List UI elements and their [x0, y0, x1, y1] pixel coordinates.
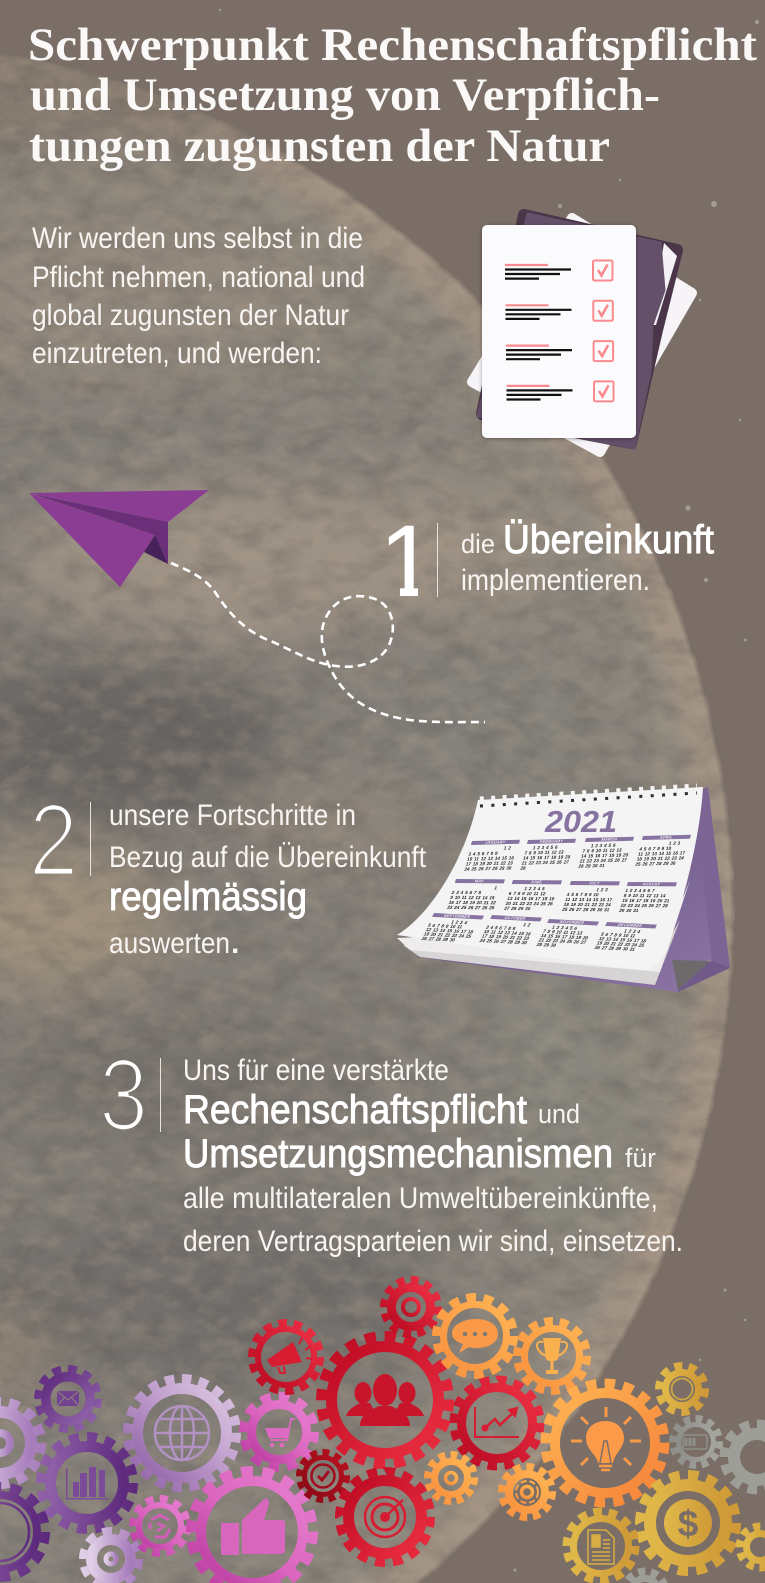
- month: May: 2 3 4 5 6 7 8: [451, 890, 482, 895]
- item 1 text: Übereinkunft: [503, 518, 714, 562]
- month: December: 26 27 28 29 30 31: [593, 945, 636, 953]
- icon: battery: [683, 1435, 707, 1449]
- month: November: 1 2 3 4 5 6: [551, 925, 578, 932]
- gear: lifebuoy: [502, 1467, 552, 1517]
- month: February: 7 8 9 10 11 12 13: [524, 850, 565, 856]
- title: und Umsetzung von Verpflich-: [30, 69, 660, 121]
- month: May: 23 24 25 26 27 28 29: [447, 905, 495, 910]
- icon: people: [346, 1374, 424, 1426]
- month: April: 1 2 3: [668, 841, 681, 846]
- calendar page: [397, 787, 703, 970]
- intro text: einzutreten, und werden:: [32, 337, 322, 370]
- checklist row 4: [506, 381, 614, 401]
- month: August: 15 16 17 18 19 20 21: [622, 898, 670, 903]
- item 2 text: [109, 799, 427, 960]
- gear: recycling: [133, 1499, 187, 1553]
- month: April: 25 26 27 28 29 30: [635, 861, 677, 867]
- gear: cart: [244, 1396, 314, 1468]
- item 1 text: implementieren.: [461, 564, 650, 597]
- month: June: [504, 879, 562, 911]
- intro text: [32, 222, 365, 370]
- item 3 text: alle multilateralen Umweltübereinkünfte,: [183, 1182, 658, 1215]
- month: October: [478, 914, 542, 946]
- month: August: 8 9 10 11 12 13 14: [623, 893, 667, 898]
- month: December: DECEMBER: [617, 922, 643, 928]
- icon: target: [365, 1497, 405, 1537]
- stars: [219, 9, 759, 1571]
- month: January: 24 25 26 27 28 29 30: [464, 866, 513, 872]
- item 3: [99, 1038, 683, 1258]
- month: February: [520, 838, 576, 871]
- month: March: [578, 836, 634, 869]
- item 3 text: Uns für eine verstärkte: [183, 1054, 449, 1087]
- gear: small orange: [428, 1455, 474, 1501]
- separator: [437, 523, 438, 597]
- month: November: 7 8 9 10 11 12 13: [542, 929, 584, 937]
- gear: small lavender: [83, 1531, 139, 1583]
- gear: large gray: [724, 1424, 765, 1490]
- month: January: 17 18 19 20 21 22 23: [465, 860, 514, 867]
- month: January: 1 2: [503, 846, 512, 851]
- number 1: 1: [379, 504, 436, 618]
- month: October: 17 18 19 20 21 22 23: [480, 934, 530, 942]
- month: January: JANUARY: [485, 839, 506, 845]
- month: November: NOVEMBER: [559, 919, 585, 925]
- icon: line chart: [475, 1407, 519, 1437]
- month: August: 1 2 3 4 5 6 7: [625, 888, 656, 893]
- month: March: 28 29 30 31: [578, 863, 606, 869]
- icon: recycling: [150, 1515, 170, 1537]
- item 1: [388, 519, 714, 597]
- month: June: 13 14 15 16 17 18 19: [507, 896, 555, 901]
- month: February: FEBRUARY: [539, 838, 564, 844]
- item 3 text: deren Vertragsparteien wir sind, einsetzen.: [183, 1225, 683, 1258]
- number 2: 2: [29, 783, 78, 897]
- month: April: 4 5 6 7 8 9 10: [639, 846, 672, 852]
- gears cluster: [0, 1280, 765, 1583]
- item 3 text: und: [538, 1099, 580, 1129]
- icon: globe: [155, 1406, 209, 1460]
- month: May: [447, 878, 505, 910]
- month: March: MARCH: [601, 836, 618, 842]
- title: Schwerpunkt Rechenschaftspflicht: [28, 19, 757, 71]
- gear: top red: [384, 1280, 438, 1334]
- month: January: 3 4 5 6 7 8 9: [468, 851, 499, 857]
- icon: trophy: [537, 1338, 567, 1374]
- gear: right edge yellow: [740, 1526, 765, 1568]
- separator: [160, 1058, 161, 1132]
- checklist row 1: [505, 260, 612, 280]
- month: February: 1 2 3 4 5 6: [532, 845, 559, 850]
- item 3 text: für: [625, 1143, 656, 1173]
- gear: battery: [673, 1419, 719, 1465]
- item 2 text: auswerten: [109, 927, 230, 960]
- month: April: APRIL: [659, 834, 674, 840]
- gear: small yellow: [659, 1366, 705, 1412]
- icon: dollar: $: [678, 1503, 699, 1544]
- month: October: 3 4 5 6 7 8 9: [485, 925, 517, 932]
- lower pages: [403, 920, 680, 985]
- gear: bar chart: [41, 1437, 133, 1529]
- month: September: 19 20 21 22 23 24 25: [422, 932, 472, 940]
- month: May: 16 17 18 19 20 21 22: [448, 900, 497, 905]
- gear: line chart: [454, 1380, 540, 1466]
- month: August: 22 23 24 25 26 27 28: [620, 903, 669, 908]
- month: October: 1 2: [522, 922, 532, 928]
- intro text: Pflicht nehmen, national und: [32, 261, 365, 294]
- month: January: 10 11 12 13 14 15 16: [467, 855, 515, 862]
- gear: trophy: [518, 1322, 586, 1390]
- checklist row 2: [506, 301, 613, 321]
- gear: dollar: [640, 1475, 736, 1571]
- spiral binding: [480, 789, 697, 806]
- month: September: SEPTEMBER: [443, 913, 471, 919]
- gear: target: [340, 1472, 430, 1562]
- month: June: 20 21 22 23 24 25 26: [505, 901, 554, 906]
- checklist row 3: [506, 341, 613, 361]
- icon: desk calendar 2021: [397, 787, 730, 992]
- month: October: 10 11 12 13 14 15 16: [482, 929, 532, 937]
- item 2 text: unsere Fortschritte in: [109, 799, 356, 832]
- month: March: 7 8 9 10 11 12 13: [582, 848, 623, 854]
- month: November: 14 15 16 17 18 19 20: [539, 933, 589, 941]
- month: September: 12 13 14 15 16 17 18: [424, 927, 474, 935]
- month: December: 12 13 14 15 16 17 18: [597, 936, 647, 944]
- month: November: [535, 918, 599, 950]
- item 2 text: regelmässig: [109, 875, 307, 919]
- month: September: 26 27 28 29 30: [420, 936, 456, 943]
- icon: bulb: [571, 1407, 641, 1470]
- month: March: 21 22 23 24 25 26 27: [579, 857, 628, 864]
- item 2: [29, 783, 427, 960]
- month: May: MAY: [474, 878, 485, 883]
- month: June: 6 7 8 9 10 11 12: [508, 891, 547, 896]
- gear: light bulb: [546, 1384, 664, 1502]
- item 3 text: Rechenschaftspflicht: [183, 1088, 527, 1132]
- item 2 text: .: [231, 927, 239, 960]
- month: July: 11 12 13 14 15 16 17: [565, 897, 613, 902]
- month: August: 29 30 31: [619, 908, 639, 913]
- month: November: 21 22 23 24 25 26 27: [537, 938, 587, 946]
- gear: bottom gray: [624, 1572, 666, 1583]
- title: [28, 19, 757, 172]
- gear: thumbs up: [192, 1472, 312, 1583]
- icon: thumb: [221, 1499, 285, 1555]
- icon: paper plane: [29, 490, 209, 587]
- gear: check: [300, 1452, 346, 1500]
- month: August: [619, 881, 677, 913]
- month: December: 1 2 3 4: [623, 929, 642, 935]
- month: September: [420, 912, 484, 944]
- intro text: Wir werden uns selbst in die: [32, 222, 363, 255]
- item 1 text: die: [461, 529, 495, 559]
- icon: cart: [265, 1419, 295, 1447]
- month: June: JUNE: [530, 879, 543, 884]
- dashed flight path: [171, 563, 485, 722]
- month: March: 1 2 3 4 5 6: [590, 843, 617, 848]
- month: December: [593, 921, 657, 953]
- item 3 text: [183, 1054, 683, 1258]
- gear: envelope: [38, 1369, 98, 1429]
- icon: bars: [66, 1467, 108, 1500]
- gear: document: [566, 1512, 636, 1580]
- title: tungen zugunsten der Natur: [29, 120, 610, 172]
- month: July: JULY: [588, 880, 601, 885]
- month: July: 4 5 6 7 8 9 10: [566, 892, 600, 897]
- month: April: 11 12 13 14 15 16 17: [638, 850, 686, 857]
- month: September: 5 6 7 8 9 10 11: [427, 923, 464, 930]
- month: March: 14 15 16 17 18 19 20: [581, 852, 629, 859]
- item 3 text: Umsetzungsmechanismen: [183, 1132, 613, 1176]
- month: May: 9 10 11 12 13 14 15: [450, 895, 496, 900]
- icon: speech bubble: [452, 1319, 498, 1353]
- icon: megaphone: [267, 1338, 312, 1373]
- month: July: 25 26 27 28 29 30 31: [562, 907, 610, 912]
- gear: speech bubble: [436, 1298, 514, 1374]
- month: September: 1 2 3 4: [450, 920, 469, 926]
- gear: megaphone: [252, 1323, 320, 1391]
- number 3: 3: [99, 1038, 148, 1152]
- year: 2021: [544, 804, 617, 839]
- item 1 text: [461, 518, 714, 597]
- gear: globe: [128, 1379, 236, 1487]
- month: November: 28 29 30: [535, 942, 557, 949]
- month: July: 18 19 20 21 22 23 24: [563, 902, 612, 907]
- gear: people: [322, 1336, 448, 1464]
- month: May: 1: [494, 885, 498, 890]
- icon: check: [312, 1464, 334, 1488]
- month: October: 24 25 26 27 28 29 30: [478, 938, 528, 946]
- gear: left lavender: [0, 1402, 41, 1484]
- separator: [90, 802, 91, 876]
- month: July: [562, 880, 620, 912]
- icon: envelope: [57, 1391, 79, 1406]
- icon: document: [588, 1530, 614, 1564]
- month: April: 18 19 20 21 22 23 24: [636, 855, 685, 862]
- gear: lower left purple: [0, 1487, 45, 1577]
- month: February: 14 15 16 17 18 19 20: [523, 854, 571, 861]
- month: June: 1 2 3 4 5: [524, 886, 546, 891]
- month: January: [464, 839, 520, 872]
- month: February: 28: [520, 866, 527, 871]
- intro text: global zugunsten der Natur: [32, 299, 349, 332]
- icon: checklist documents: [472, 214, 692, 452]
- month: October: OCTOBER: [504, 915, 527, 921]
- month: June: 27 28 29 30: [504, 906, 531, 911]
- item 2 text: Bezug auf die Übereinkunft: [109, 841, 427, 874]
- month: July: 1 2 3: [596, 887, 609, 892]
- month: February: 21 22 23 24 25 26 27: [521, 859, 570, 866]
- month: December: 19 20 21 22 23 24 25: [595, 941, 645, 949]
- front sheet: [482, 225, 636, 438]
- month: August: AUGUST: [642, 881, 661, 886]
- month: December: 5 6 7 8 9 10 11: [600, 932, 637, 939]
- month: April: [635, 834, 691, 867]
- calendar stand: [417, 787, 730, 992]
